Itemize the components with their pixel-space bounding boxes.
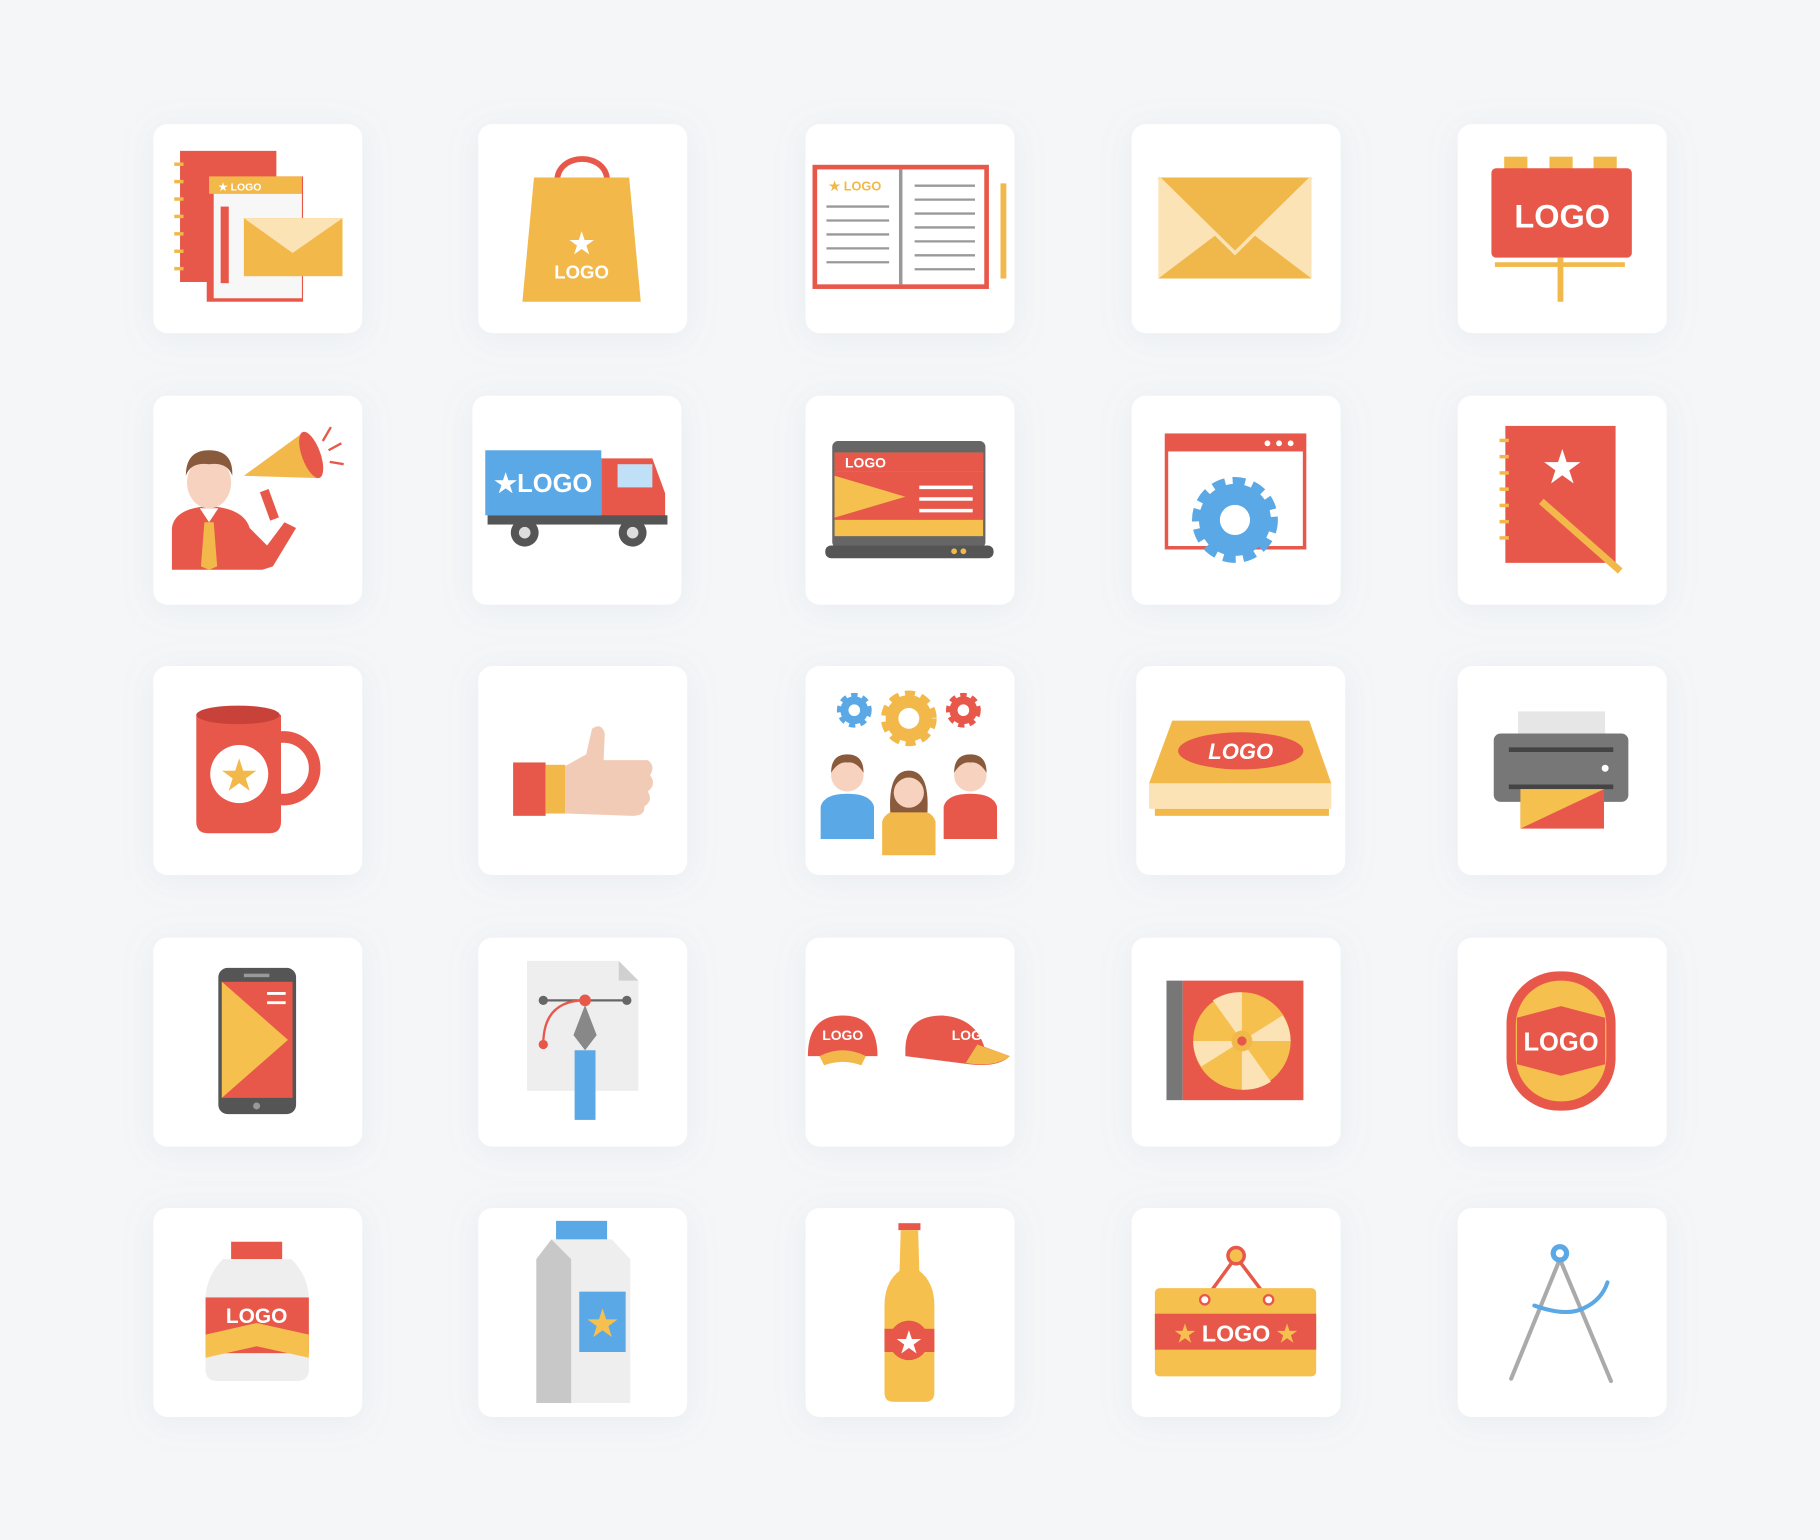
- tile: milk carton: ★: [587, 1305, 618, 1344]
- tile: hanging sign: ★ LOGO ★: [1175, 1321, 1298, 1347]
- tile: laptop: LOGO: [845, 455, 886, 471]
- tile: laptop: [806, 396, 1014, 605]
- tile: compass: [1458, 1208, 1667, 1417]
- tile: browser settings: [1132, 396, 1341, 605]
- tile: shopping bag: LOGO: [554, 262, 609, 283]
- tile: stationery: [153, 124, 362, 333]
- tile: delivery truck: ★LOGO: [494, 470, 592, 498]
- tile: thumbs up: [478, 666, 687, 875]
- tile: team with gears: [806, 666, 1014, 875]
- tile: beer bottle: [806, 1208, 1014, 1417]
- tile: pizza box: LOGO: [1208, 739, 1273, 764]
- tile: pen tool document: [478, 938, 687, 1147]
- tile: milk carton: [478, 1208, 687, 1417]
- tile: CD case: [1132, 938, 1341, 1147]
- tile: smartphone: [153, 938, 362, 1147]
- tile: billboard: [1458, 124, 1667, 333]
- tile: envelope: [1132, 124, 1341, 333]
- tile: jar: [153, 1208, 362, 1417]
- tile: man with megaphone: [153, 396, 362, 605]
- tile: hanging sign: [1132, 1208, 1341, 1417]
- tile: shopping bag: [478, 124, 687, 333]
- tile: open book: [806, 124, 1014, 333]
- tile: logo badge: [1458, 938, 1667, 1147]
- tile: stationery: ★ LOGO: [217, 182, 261, 193]
- tile: mug: ★: [222, 754, 257, 798]
- tile: beer bottle: ★: [896, 1327, 921, 1358]
- tile: caps: [806, 938, 1014, 1147]
- tile: logo badge: LOGO: [1523, 1028, 1599, 1056]
- tile: printer: [1458, 666, 1667, 875]
- tile: open book: ★ LOGO: [829, 178, 881, 193]
- tile: billboard: LOGO: [1514, 198, 1610, 234]
- tile: pizza box: [1136, 666, 1345, 875]
- tile: notebook with pencil: ★: [1543, 444, 1581, 491]
- tile: caps: LOGO: [822, 1027, 863, 1043]
- tile: shopping bag: ★: [569, 228, 594, 259]
- tile: caps: LOG: [952, 1027, 982, 1043]
- tile: mug: [153, 666, 362, 875]
- tile: jar: LOGO: [226, 1305, 287, 1328]
- tile: delivery truck: [472, 396, 681, 605]
- tile: notebook with pencil: [1458, 396, 1667, 605]
